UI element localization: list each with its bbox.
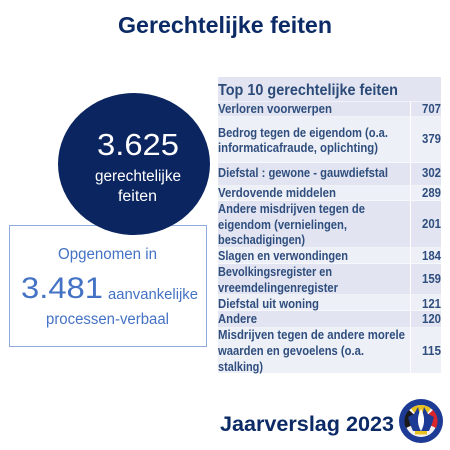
row: andere misdrijven (218, 201, 441, 248)
table header (218, 77, 441, 102)
row: misdrijven morele waarden: stalking) (218, 360, 263, 374)
text: aanvankelijke: aanvankelijke (108, 286, 198, 303)
row: bedrog: Bedrog tegen de eigendom (o.a. (218, 126, 388, 140)
row: bevolkingsregister (218, 264, 441, 295)
row: bedrog (218, 117, 441, 162)
row: misdrijven morele waarden (217, 328, 441, 374)
row: slagen (218, 248, 441, 264)
table header: Top 10 gerechtelijke feiten (218, 82, 398, 99)
row: verdovende middelen: Verdovende middelen (218, 186, 336, 200)
row: bevolkingsregister: vreemdelingenregister (218, 281, 338, 295)
row: andere misdrijven: eigendom (vernielingen, (218, 218, 347, 232)
row: diefstal uit woning: Diefstal uit woning (218, 297, 319, 311)
number: 3.625: 3.625 (97, 127, 179, 162)
row: bedrog: 379 (422, 132, 441, 146)
text: feiten: feiten (118, 188, 157, 205)
icon: police logo (399, 399, 443, 443)
row: verloren voorwerpen: Verloren voorwerpen (218, 102, 332, 116)
row: verloren voorwerpen: 707 (422, 102, 441, 116)
row: andere: 120 (422, 312, 441, 326)
row: bevolkingsregister: Bevolkingsregister en (218, 265, 332, 279)
number: 3.481: 3.481 (21, 272, 103, 305)
row: misdrijven morele waarden: 115 (422, 344, 441, 358)
row: verdovende middelen: 289 (422, 186, 441, 200)
row: diefstal (218, 163, 441, 186)
row: slagen: Slagen en verwondingen (218, 249, 348, 263)
row: misdrijven morele waarden: Misdrijven tegen de andere morele (218, 328, 405, 342)
panel: total circle (58, 93, 210, 235)
row: slagen: 184 (422, 249, 441, 263)
row: bedrog: informaticafraude, oplichting) (218, 141, 378, 155)
row: verdovende middelen (218, 186, 441, 200)
row: diefstal uit woning (218, 295, 441, 311)
row: diefstal uit woning: 121 (422, 297, 441, 311)
text: processen-verbaal: processen-verbaal (46, 311, 169, 328)
row: diefstal: 302 (422, 166, 441, 180)
text: gerechtelijke: gerechtelijke (95, 168, 181, 185)
row: andere misdrijven: Andere misdrijven tegen de (218, 202, 365, 216)
row: misdrijven morele waarden: waarden en gevoelens (o.a. (217, 344, 364, 358)
panel: processen-verbaal box (10, 226, 206, 346)
row: andere (218, 311, 441, 328)
row: diefstal: Diefstal : gewone - gauwdiefstal (218, 166, 388, 180)
row: andere: Andere (218, 312, 257, 326)
row: andere misdrijven: 201 (422, 217, 441, 231)
row: andere misdrijven: beschadigingen) (218, 233, 305, 247)
row: verloren voorwerpen (218, 102, 441, 116)
panel: top 10 table (217, 77, 441, 374)
row: bevolkingsregister: 159 (422, 272, 441, 286)
footer: jaarverslag: Jaarverslag 2023 (220, 412, 394, 436)
title: Gerechtelijke feiten (118, 12, 332, 38)
text: opgenomen in: Opgenomen in (58, 246, 157, 263)
